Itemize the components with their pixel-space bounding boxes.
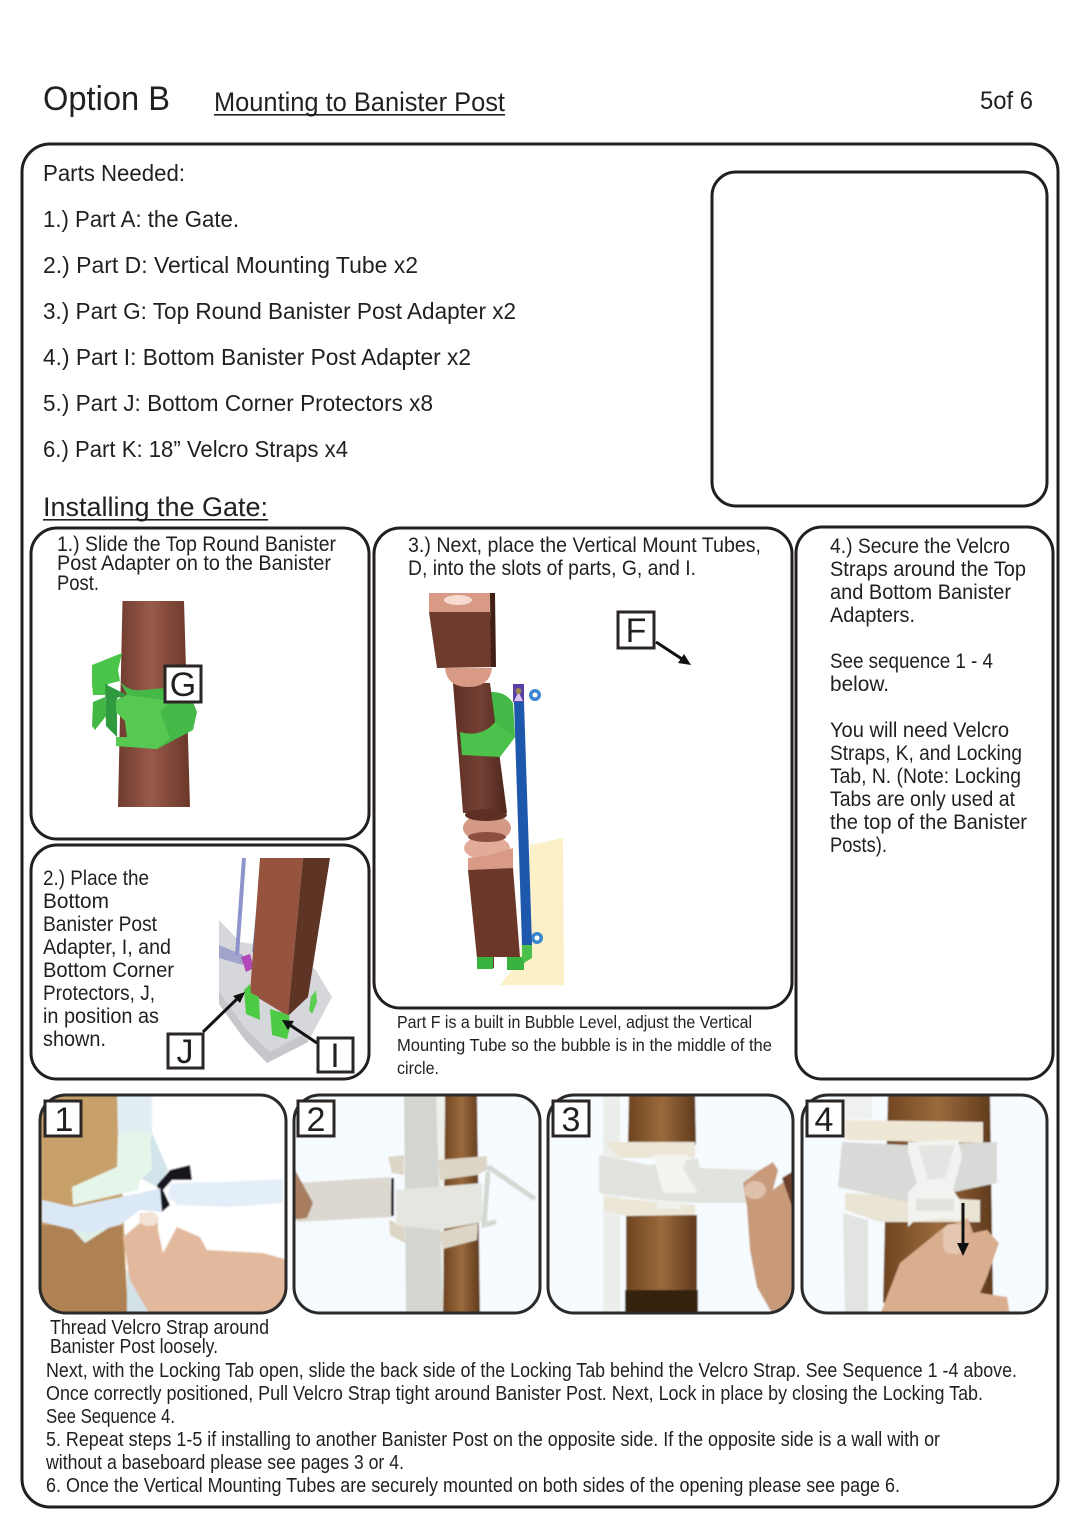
text: closing instructions: 6. Once the Vertical Mounting Tubes are securely mounted on both sides of the opening please see page 6.: [46, 1475, 900, 1497]
label box 3: [553, 1101, 589, 1139]
text: sequence caption: Thread Velcro Strap around: [50, 1317, 269, 1339]
text: step 1 instructions: 1.) Slide the Top Round Banister: [57, 533, 336, 556]
text: step 2 instructions: Adapter, I, and: [43, 936, 171, 959]
text: step 1 instructions: Post Adapter on to the Banister: [57, 552, 331, 575]
text block: parts needed list: 3.) Part G: Top Round Banister Post Adapter x2: [43, 298, 516, 324]
illustration: square post on base with parts I and J: [219, 858, 332, 1063]
text: closing instructions: [45, 1360, 1017, 1497]
text: step 2 instructions: Bottom Corner: [43, 959, 174, 982]
label box J: [168, 1033, 203, 1071]
text: step 2 instructions: 2.) Place the: [43, 867, 149, 890]
label box 4: 4: [815, 1101, 833, 1139]
text: step 3 instructions: D, into the slots of parts, G, and I.: [408, 557, 696, 580]
text block: parts needed list: 6.) Part K: 18” Velcro Straps x4: [43, 436, 348, 462]
text: closing instructions: Once correctly positioned, Pull Velcro Strap tight around Banister Post. Next, Lock in place by closing the Locking Tab.: [46, 1383, 983, 1405]
text: bubble level note: circle.: [397, 1058, 439, 1078]
text: step 4 instructions: 4.) Secure the Velcro: [830, 535, 1010, 558]
text: step 1 instructions: Post.: [57, 572, 99, 595]
text: step 2 instructions: in position as: [43, 1005, 159, 1028]
text: step 2 instructions: Bottom: [43, 890, 109, 913]
text: bubble level note: Part F is a built in Bubble Level, adjust the Vertical: [397, 1012, 752, 1032]
text block: parts needed list: 1.) Part A: the Gate.: [43, 206, 239, 232]
panel: step 3: [374, 528, 792, 1008]
text: step 2 instructions: shown.: [43, 1028, 106, 1051]
arrow: to part F: [656, 642, 691, 665]
label box F: F: [626, 612, 646, 650]
photo 4: closing the locking tab: [800, 1093, 1050, 1315]
text block: parts needed list: 4.) Part I: Bottom Banister Post Adapter x2: [43, 344, 471, 370]
text: step 4 instructions: Tabs are only used at: [830, 788, 1015, 811]
text: step 4 instructions: Posts).: [830, 834, 887, 857]
text: step 4 instructions: below.: [830, 673, 889, 696]
text: step 2 instructions: Protectors, J,: [43, 982, 155, 1005]
panel: step 4: [796, 527, 1053, 1079]
label box 1: 1: [55, 1101, 73, 1139]
label box 2: 2: [307, 1101, 325, 1139]
label box J: J: [176, 1033, 194, 1071]
text: bubble level note: [397, 1012, 772, 1078]
heading: Mounting to Banister Post: Mounting to Banister Post: [214, 87, 505, 117]
photo 2: strap through adapter: [292, 1093, 542, 1315]
text block: parts needed list: 5.) Part J: Bottom Corner Protectors x8: [43, 390, 433, 416]
illustration: turned banister post with vertical tube: [429, 593, 564, 985]
text: step 3 instructions: 3.) Next, place the Vertical Mount Tubes,: [408, 534, 761, 557]
page number: 5of 6: [980, 87, 1033, 115]
text: step 4 instructions: the top of the Banister: [830, 811, 1027, 834]
illustration: round post with green adapter G: [92, 601, 197, 807]
photo 3: wrapping strap through tab: [546, 1093, 796, 1315]
arrow: to part I: [282, 1020, 317, 1043]
text: step 4 instructions: [830, 535, 1027, 857]
text block: parts needed list: [43, 160, 516, 462]
text: sequence caption: Banister Post loosely.: [50, 1336, 218, 1358]
text: closing instructions: See Sequence 4.: [46, 1406, 175, 1428]
text: bubble level note: Mounting Tube so the bubble is in the middle of the: [397, 1035, 772, 1055]
text: step 3 instructions: [408, 534, 761, 580]
label box 1: [45, 1101, 81, 1139]
label box 3: 3: [562, 1101, 580, 1139]
panel: step 2: [31, 845, 369, 1079]
panel: step 1: [31, 528, 369, 839]
text block: parts needed list: 2.) Part D: Vertical Mounting Tube x2: [43, 252, 418, 278]
text: step 4 instructions: Tab, N. (Note: Locking: [830, 765, 1021, 788]
text: step 4 instructions: and Bottom Banister: [830, 581, 1011, 604]
label box G: G: [170, 666, 196, 704]
text: step 4 instructions: See sequence 1 - 4: [830, 650, 993, 673]
heading: Installing the Gate: Installing the Gate:: [43, 492, 268, 522]
text: step 4 instructions: Straps around the Top: [830, 558, 1026, 581]
arrow: pull locking tab down: [957, 1203, 969, 1256]
text: step 2 instructions: [43, 867, 174, 1051]
label box 4: [807, 1101, 843, 1139]
label box F: [618, 612, 654, 650]
text: sequence caption: [50, 1317, 269, 1358]
panel: empty image box: [712, 172, 1047, 506]
title: Option B: Option B: [43, 80, 170, 118]
text: step 2 instructions: Banister Post: [43, 913, 157, 936]
text block: parts needed list: Parts Needed:: [43, 160, 185, 186]
text: step 4 instructions: Straps, K, and Locking: [830, 742, 1022, 765]
photo 1: threading the strap: [38, 1093, 288, 1315]
label box I: [318, 1037, 353, 1075]
label box 2: [298, 1101, 334, 1139]
text: closing instructions: 5. Repeat steps 1-5 if installing to another Banister Post on the opposite side. If the opposite side is a wall with or: [46, 1429, 940, 1451]
text: closing instructions: without a baseboard please see pages 3 or 4.: [45, 1452, 404, 1474]
text: step 4 instructions: You will need Velcro: [830, 719, 1009, 742]
text: step 4 instructions: Adapters.: [830, 604, 915, 627]
label box I: I: [330, 1037, 340, 1075]
arrow: to part J: [203, 992, 245, 1032]
text: step 1 instructions: [57, 533, 336, 595]
